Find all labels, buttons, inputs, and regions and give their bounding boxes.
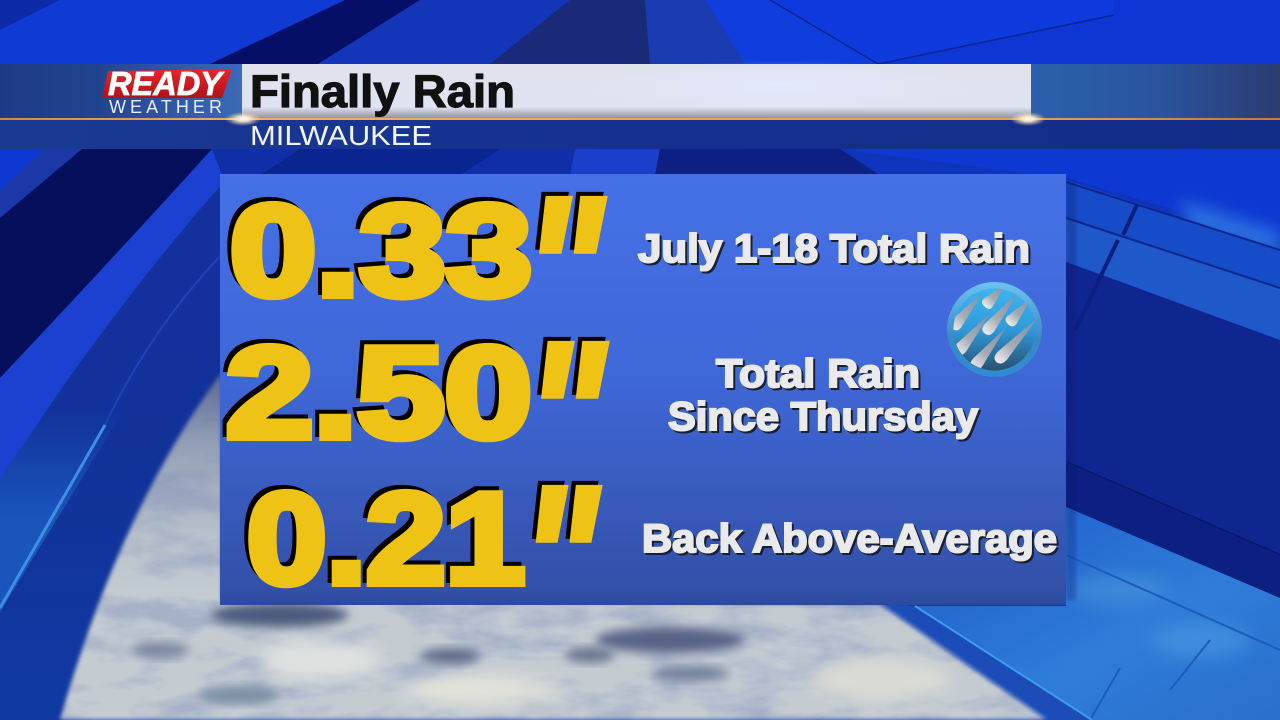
flare left — [225, 112, 261, 126]
stat: 2.50 inches: 2.50 — [222, 317, 528, 461]
stat: 0.33 inches: 0.33 — [226, 175, 528, 319]
stat: 0.33 inches — [226, 151, 605, 387]
title: Finally Rain — [250, 66, 515, 117]
left arcs — [0, 149, 45, 190]
label: total since Thursday: Since Thursday — [670, 397, 981, 441]
stat: 2.50 inches: " — [526, 300, 607, 532]
stat: 0.21 inches: " — [521, 444, 600, 676]
stat: 2.50 inches — [222, 296, 607, 532]
label: total since Thursday: Since Thursday — [668, 395, 979, 439]
stat: 0.33 inches: " — [524, 155, 605, 387]
header band — [0, 61, 1280, 149]
strip between header and panel — [212, 149, 600, 175]
label: July total: July 1-18 Total Rain — [638, 227, 1030, 271]
label: total since Thursday — [668, 352, 981, 441]
stat: 2.50 inches: " — [522, 296, 603, 528]
label: July total: July 1-18 Total Rain — [640, 229, 1032, 273]
logo: Ready Weather: WEATHER — [109, 97, 222, 117]
subtitle: MILWAUKEE — [250, 120, 432, 151]
right band — [1031, 64, 1280, 119]
icon: rain drops — [947, 280, 1042, 377]
logo: Ready Weather: READY — [108, 65, 225, 102]
logo backing — [0, 64, 242, 119]
title bar — [242, 64, 1031, 119]
right arcs — [1180, 200, 1280, 258]
stat: 0.21 inches: " — [517, 440, 596, 672]
panel: rain stats — [220, 174, 1066, 605]
stat: 0.21 inches — [243, 440, 600, 676]
stat: 0.33 inches: " — [520, 151, 601, 383]
orange rule — [0, 118, 1280, 120]
flare right — [1010, 112, 1046, 126]
floor tiles — [915, 507, 1280, 720]
background: cloudy sky — [50, 360, 1070, 720]
stat: 2.50 inches: 2.50 — [226, 321, 532, 465]
label: back above average: Back Above-Average — [644, 519, 1059, 563]
stat: 0.33 inches: 0.33 — [230, 179, 532, 323]
stat: 0.21 inches: 0.21 — [247, 467, 525, 611]
title bar sheen — [590, 61, 970, 109]
panel shadow — [1066, 180, 1076, 600]
label: total since Thursday: Total Rain — [716, 352, 920, 396]
stat: 0.21 inches: 0.21 — [243, 463, 521, 607]
logo: Ready Weather — [102, 65, 232, 117]
label: back above average: Back Above-Average — [642, 517, 1057, 561]
label: total since Thursday: Total Rain — [718, 354, 922, 398]
